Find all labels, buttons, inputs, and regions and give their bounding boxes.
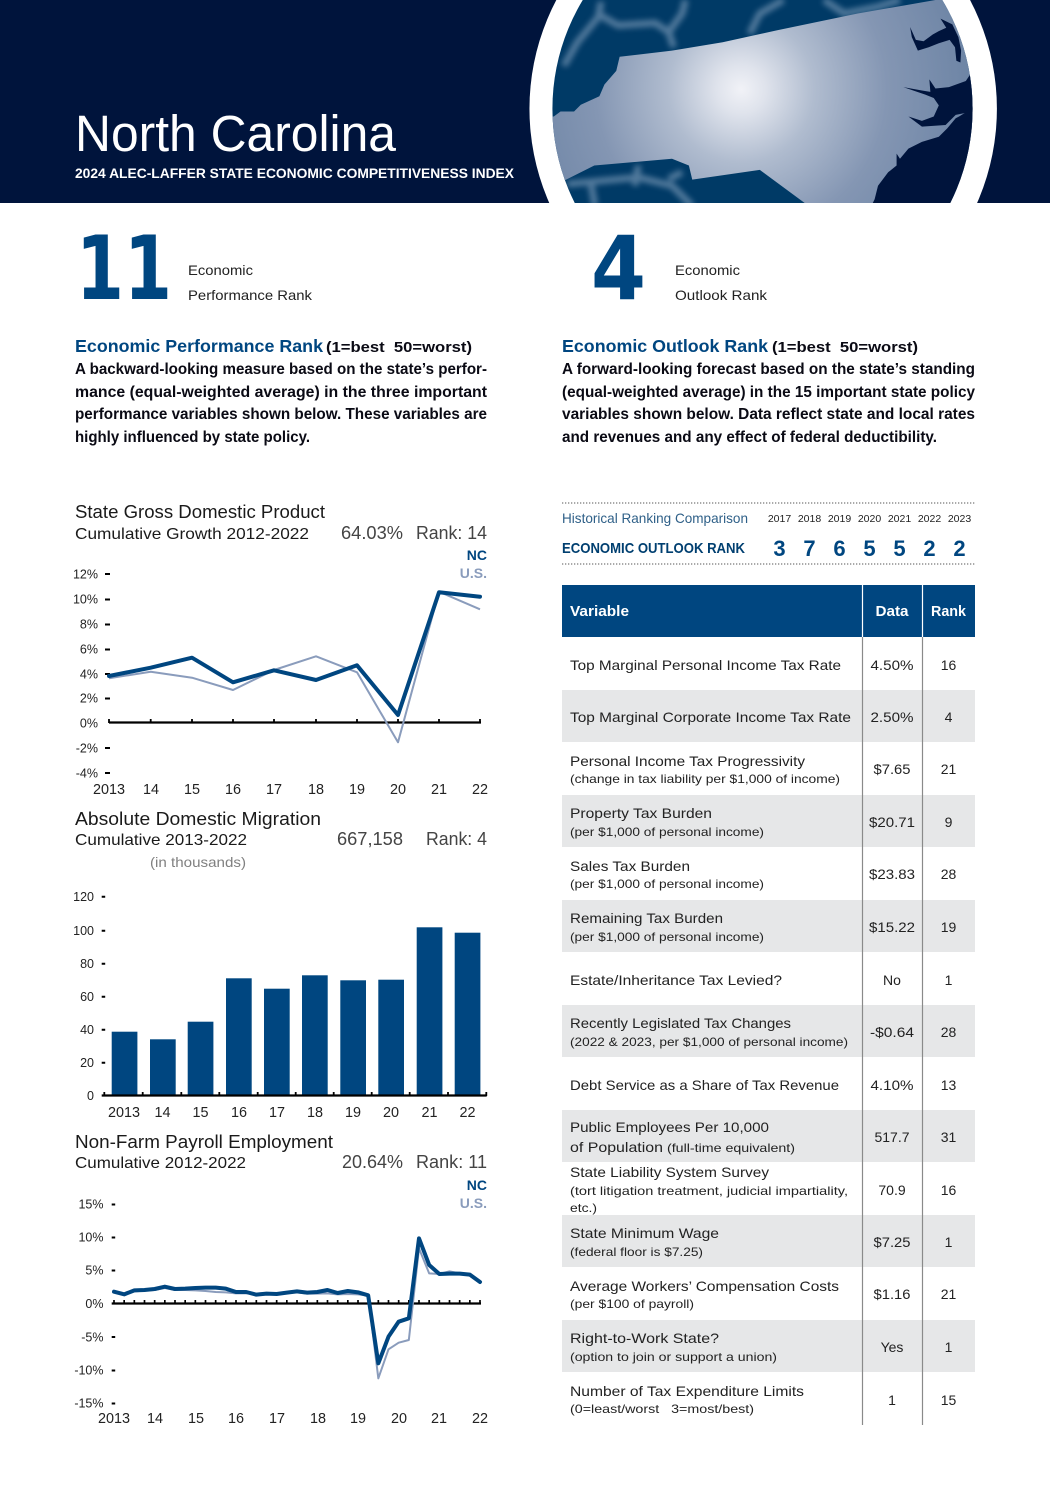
row: workers compensation	[570, 1278, 956, 1311]
performance rank badge: Economic	[188, 262, 253, 278]
row: estate tax: 1	[945, 972, 953, 988]
chart heading: payroll employment: 20.64%	[342, 1152, 403, 1172]
line chart: state GDP growth, NC vs U.S.: 6%	[80, 642, 98, 656]
row: public employees: (full-time equivalent)	[667, 1141, 795, 1155]
chart heading: state GDP: 64.03%	[341, 523, 403, 543]
row: recent tax changes	[570, 1015, 956, 1049]
bar chart: domestic migration: 100	[73, 924, 94, 938]
row: workers compensation: $1.16	[874, 1286, 911, 1302]
historical ranking comparison: 2022	[918, 513, 941, 525]
outlook rank badge	[591, 217, 768, 320]
text block: economic performance rank: performance variables shown below. These variables are	[75, 406, 487, 423]
row: property tax: 9	[945, 814, 953, 830]
line chart: state GDP growth, NC vs U.S.: 4%	[80, 668, 98, 682]
line chart: payroll employment, NC vs U.S.: 21	[431, 1411, 447, 1427]
row: tax expenditure limits: (0=least/worst 3=most/best)	[570, 1402, 754, 1416]
line chart: state GDP growth, NC vs U.S.: 2013	[93, 782, 125, 798]
line chart: payroll employment, NC vs U.S.: 19	[350, 1411, 366, 1427]
historical ranking comparison: 2019	[828, 513, 851, 525]
table header row: Variable	[570, 604, 629, 620]
row: progressivity: $7.65	[874, 761, 911, 777]
row: minimum wage: State Minimum Wage	[570, 1225, 719, 1241]
text block: economic performance rank: A backward-looking measure based on the state’s perfor-	[75, 361, 487, 378]
line chart: payroll employment, NC vs U.S.: 5%	[85, 1264, 104, 1278]
row: liability survey	[570, 1164, 956, 1215]
line chart: payroll employment, NC vs U.S.: 17	[269, 1411, 285, 1427]
row: debt service: 4.10%	[870, 1077, 914, 1093]
historical ranking comparison: 2017	[768, 513, 791, 525]
line chart: state GDP growth, NC vs U.S.: 2%	[80, 692, 98, 706]
bar chart: domestic migration: 18	[307, 1105, 323, 1121]
text block: economic outlook rank: A forward-looking forecast based on the state’s standing	[562, 361, 975, 378]
row: tax expenditure limits: Number of Tax Expenditure Limits	[570, 1383, 804, 1399]
row: recent tax changes: -$0.64	[870, 1024, 914, 1040]
row: liability survey: (tort litigation treatment, judicial impartiality,	[570, 1184, 848, 1198]
row: corporate income tax: 2.50%	[870, 709, 914, 725]
row: estate tax	[570, 972, 953, 988]
line chart: payroll employment, NC vs U.S.: -10%	[74, 1364, 104, 1378]
row: remaining tax: (per $1,000 of personal income)	[570, 930, 764, 944]
line chart: payroll employment, NC vs U.S.: -15%	[74, 1396, 104, 1410]
text block: economic performance rank	[75, 336, 487, 446]
historical ranking comparison: 2023	[948, 513, 971, 525]
bar chart: domestic migration: 15	[192, 1105, 209, 1121]
title: North Carolina	[75, 105, 397, 162]
performance rank badge: 11	[76, 217, 172, 320]
row: remaining tax: 19	[941, 919, 956, 935]
line chart: state GDP growth, NC vs U.S.: 18	[308, 782, 324, 798]
row: workers compensation: 21	[941, 1286, 956, 1302]
row: public employees: 31	[941, 1129, 956, 1145]
row: public employees: of Population	[570, 1139, 663, 1155]
row: public employees: 517.7	[874, 1129, 910, 1145]
row: debt service: 13	[941, 1077, 956, 1093]
chart heading: state GDP: NC	[467, 547, 487, 563]
row: liability survey: 70.9	[878, 1182, 906, 1198]
bar chart: domestic migration: 14	[154, 1105, 171, 1121]
bar chart: domestic migration	[73, 890, 487, 1121]
text block: economic outlook rank	[562, 336, 975, 446]
line chart: payroll employment, NC vs U.S.: 18	[310, 1411, 326, 1427]
text block: economic outlook rank: (1=best 50=worst)	[772, 339, 918, 356]
line chart: payroll employment, NC vs U.S.: 20	[391, 1411, 407, 1427]
row: workers compensation: Average Workers’ Compensation Costs	[570, 1278, 839, 1294]
row: progressivity	[570, 753, 956, 786]
line chart: payroll employment, NC vs U.S.	[74, 1198, 488, 1427]
outlook rank badge: Economic	[675, 262, 740, 278]
line chart: state GDP growth, NC vs U.S.: 16	[225, 782, 241, 798]
historical ranking comparison: 6	[833, 536, 846, 561]
row: personal income tax: 4.50%	[870, 657, 914, 673]
bar chart: domestic migration: 20	[80, 1056, 94, 1070]
outlook rank badge: Outlook Rank	[675, 287, 768, 303]
row: remaining tax	[570, 910, 956, 944]
line chart: state GDP growth, NC vs U.S.: 22	[472, 782, 488, 798]
row: corporate income tax: Top Marginal Corporate Income Tax Rate	[570, 709, 851, 725]
line chart: payroll employment, NC vs U.S.: 16	[228, 1411, 244, 1427]
row: public employees: Public Employees Per 10,000	[570, 1119, 769, 1135]
historical ranking comparison: 5	[893, 536, 906, 561]
row: minimum wage: 1	[945, 1234, 953, 1250]
chart heading: domestic migration: Rank: 4	[426, 829, 487, 849]
chart heading: state GDP	[75, 502, 487, 581]
performance rank badge	[76, 217, 313, 320]
historical ranking comparison: 2021	[888, 513, 911, 525]
bar chart: domestic migration: 20	[383, 1105, 399, 1121]
chart heading: payroll employment: Cumulative 2012-2022	[75, 1155, 246, 1172]
row: right to work: Yes	[881, 1339, 903, 1355]
bar chart: domestic migration: 80	[80, 957, 94, 971]
outlook rank badge: 4	[591, 217, 646, 320]
line chart: payroll employment, NC vs U.S.: 15	[188, 1411, 204, 1427]
table header row	[562, 585, 975, 637]
historical ranking comparison: 2	[923, 536, 936, 561]
subtitle: 2024 ALEC-LAFFER STATE ECONOMIC COMPETITIVENESS INDEX	[75, 165, 515, 181]
line chart: payroll employment, NC vs U.S.: 14	[147, 1411, 163, 1427]
historical ranking comparison: 2	[953, 536, 966, 561]
chart heading: payroll employment	[75, 1132, 487, 1211]
row: property tax: $20.71	[869, 814, 915, 830]
row: personal income tax: Top Marginal Personal Income Tax Rate	[570, 657, 841, 673]
row: estate tax: Estate/Inheritance Tax Levied?	[570, 972, 782, 988]
bar chart: domestic migration: 40	[80, 1023, 94, 1037]
line chart: state GDP growth, NC vs U.S.: 0%	[80, 716, 98, 730]
bar chart: domestic migration: 17	[269, 1105, 285, 1121]
row: sales tax: Sales Tax Burden	[570, 858, 690, 874]
row: corporate income tax	[570, 709, 953, 725]
line chart: payroll employment, NC vs U.S.: 22	[472, 1411, 488, 1427]
line chart: payroll employment, NC vs U.S.: 15%	[78, 1198, 104, 1212]
row: estate tax: No	[883, 972, 901, 988]
row: property tax: Property Tax Burden	[570, 805, 712, 821]
chart heading: state GDP: Rank: 14	[416, 523, 487, 543]
historical ranking comparison: ECONOMIC OUTLOOK RANK	[562, 540, 745, 557]
historical ranking comparison: 5	[863, 536, 876, 561]
historical ranking comparison: 3	[773, 536, 786, 561]
bar chart: domestic migration: 16	[231, 1105, 247, 1121]
chart heading: payroll employment: Rank: 11	[416, 1152, 487, 1172]
row: workers compensation: (per $100 of payroll)	[570, 1297, 694, 1311]
chart heading: state GDP: U.S.	[460, 565, 487, 581]
row: right to work: 1	[945, 1339, 953, 1355]
row: liability survey: 16	[941, 1182, 956, 1198]
line chart: payroll employment, NC vs U.S.: -5%	[81, 1330, 104, 1344]
row: remaining tax: $15.22	[869, 919, 915, 935]
bar chart: domestic migration: 19	[345, 1105, 361, 1121]
row: minimum wage: $7.25	[874, 1234, 911, 1250]
table: policy variables	[562, 585, 975, 1425]
bar chart: domestic migration: 60	[80, 990, 94, 1004]
row: property tax: (per $1,000 of personal income)	[570, 825, 764, 839]
chart heading: domestic migration: Cumulative 2013-2022	[75, 832, 247, 849]
row: sales tax: (per $1,000 of personal income)	[570, 877, 764, 891]
text block: economic outlook rank: Economic Outlook Rank	[562, 336, 768, 356]
text block: economic outlook rank: and revenues and any effect of federal deductibility.	[562, 429, 937, 446]
line chart: state GDP growth, NC vs U.S.: 21	[431, 782, 447, 798]
row: debt service: Debt Service as a Share of Tax Revenue	[570, 1077, 839, 1093]
line chart: state GDP growth, NC vs U.S.: 20	[390, 782, 406, 798]
row: sales tax	[570, 858, 956, 891]
row: liability survey: State Liability System Survey	[570, 1164, 769, 1180]
row: progressivity: Personal Income Tax Progressivity	[570, 753, 805, 769]
row: right to work: (option to join or support a union)	[570, 1350, 777, 1364]
line chart: state GDP growth, NC vs U.S.: 14	[143, 782, 159, 798]
bar chart: domestic migration: 120	[73, 890, 94, 904]
text block: economic performance rank: mance (equal-weighted average) in the three important	[75, 384, 487, 401]
line chart: state GDP growth, NC vs U.S.	[73, 568, 488, 798]
chart heading: payroll employment: U.S.	[460, 1195, 487, 1211]
row: recent tax changes: 28	[941, 1024, 956, 1040]
line chart: payroll employment, NC vs U.S.: 2013	[98, 1411, 130, 1427]
text block: economic performance rank: highly influenced by state policy.	[75, 429, 310, 446]
row: tax expenditure limits	[570, 1383, 956, 1416]
row: tax expenditure limits: 15	[941, 1392, 956, 1408]
line chart: state GDP growth, NC vs U.S.: 10%	[73, 592, 98, 606]
line chart: state GDP growth, NC vs U.S.: -4%	[76, 766, 98, 780]
historical ranking comparison: Historical Ranking Comparison	[562, 510, 748, 526]
row: personal income tax: 16	[941, 657, 956, 673]
bar chart: domestic migration: 21	[421, 1105, 438, 1121]
line chart: payroll employment, NC vs U.S.: 0%	[85, 1297, 104, 1311]
row: minimum wage	[570, 1225, 953, 1259]
bar chart: domestic migration: 0	[87, 1089, 94, 1103]
row: recent tax changes: (2022 & 2023, per $1,000 of personal income)	[570, 1035, 848, 1049]
chart heading: domestic migration: (in thousands)	[150, 854, 246, 870]
chart heading: domestic migration	[75, 809, 487, 870]
row: corporate income tax: 4	[945, 709, 953, 725]
row: minimum wage: (federal floor is $7.25)	[570, 1245, 703, 1259]
line chart: state GDP growth, NC vs U.S.: 12%	[73, 568, 98, 582]
table header row: Data	[876, 604, 909, 620]
bar chart: domestic migration: 2013	[108, 1105, 140, 1121]
row: property tax	[570, 805, 953, 839]
text block: economic outlook rank: variables shown below. Data reflect state and local rates	[562, 406, 975, 423]
row: public employees	[570, 1119, 956, 1155]
line chart: state GDP growth, NC vs U.S.: 15	[184, 782, 200, 798]
chart heading: state GDP: Cumulative Growth 2012-2022	[75, 526, 309, 543]
line chart: payroll employment, NC vs U.S.: 10%	[78, 1230, 104, 1244]
row: sales tax: 28	[941, 866, 956, 882]
row: liability survey: etc.)	[570, 1201, 597, 1215]
chart heading: payroll employment: NC	[467, 1177, 487, 1193]
line chart: state GDP growth, NC vs U.S.: -2%	[76, 742, 98, 756]
historical ranking comparison: 7	[803, 536, 816, 561]
map medallion: North Carolina	[529, 0, 997, 203]
row: sales tax: $23.83	[869, 866, 915, 882]
line chart: state GDP growth, NC vs U.S.: 8%	[80, 618, 98, 632]
text block: economic outlook rank: (equal-weighted average) in the 15 important state policy	[562, 384, 975, 401]
chart heading: domestic migration: Absolute Domestic Migration	[75, 809, 321, 829]
row: progressivity: (change in tax liability per $1,000 of income)	[570, 772, 840, 786]
historical ranking comparison: 2018	[798, 513, 821, 525]
row: debt service	[570, 1077, 956, 1093]
line chart: state GDP growth, NC vs U.S.: 19	[349, 782, 365, 798]
text block: economic performance rank: (1=best 50=worst)	[326, 339, 472, 356]
header banner	[0, 0, 1050, 203]
row: right to work	[570, 1330, 953, 1364]
bar chart: domestic migration: 22	[459, 1105, 476, 1121]
text block: economic performance rank: Economic Performance Rank	[75, 336, 323, 356]
row: recent tax changes: Recently Legislated Tax Changes	[570, 1015, 791, 1031]
row: right to work: Right-to-Work State?	[570, 1330, 719, 1346]
row: progressivity: 21	[941, 761, 956, 777]
table header row: Rank	[931, 604, 967, 620]
historical ranking comparison	[562, 503, 975, 564]
chart heading: payroll employment: Non-Farm Payroll Employment	[75, 1132, 333, 1152]
line chart: state GDP growth, NC vs U.S.: 17	[266, 782, 282, 798]
performance rank badge: Performance Rank	[188, 287, 313, 303]
row: remaining tax: Remaining Tax Burden	[570, 910, 723, 926]
table row shading	[562, 690, 975, 1372]
row: personal income tax	[570, 657, 956, 673]
chart heading: domestic migration: 667,158	[337, 829, 403, 849]
row: tax expenditure limits: 1	[888, 1392, 896, 1408]
chart heading: state GDP: State Gross Domestic Product	[75, 502, 325, 522]
historical ranking comparison: 2020	[858, 513, 881, 525]
